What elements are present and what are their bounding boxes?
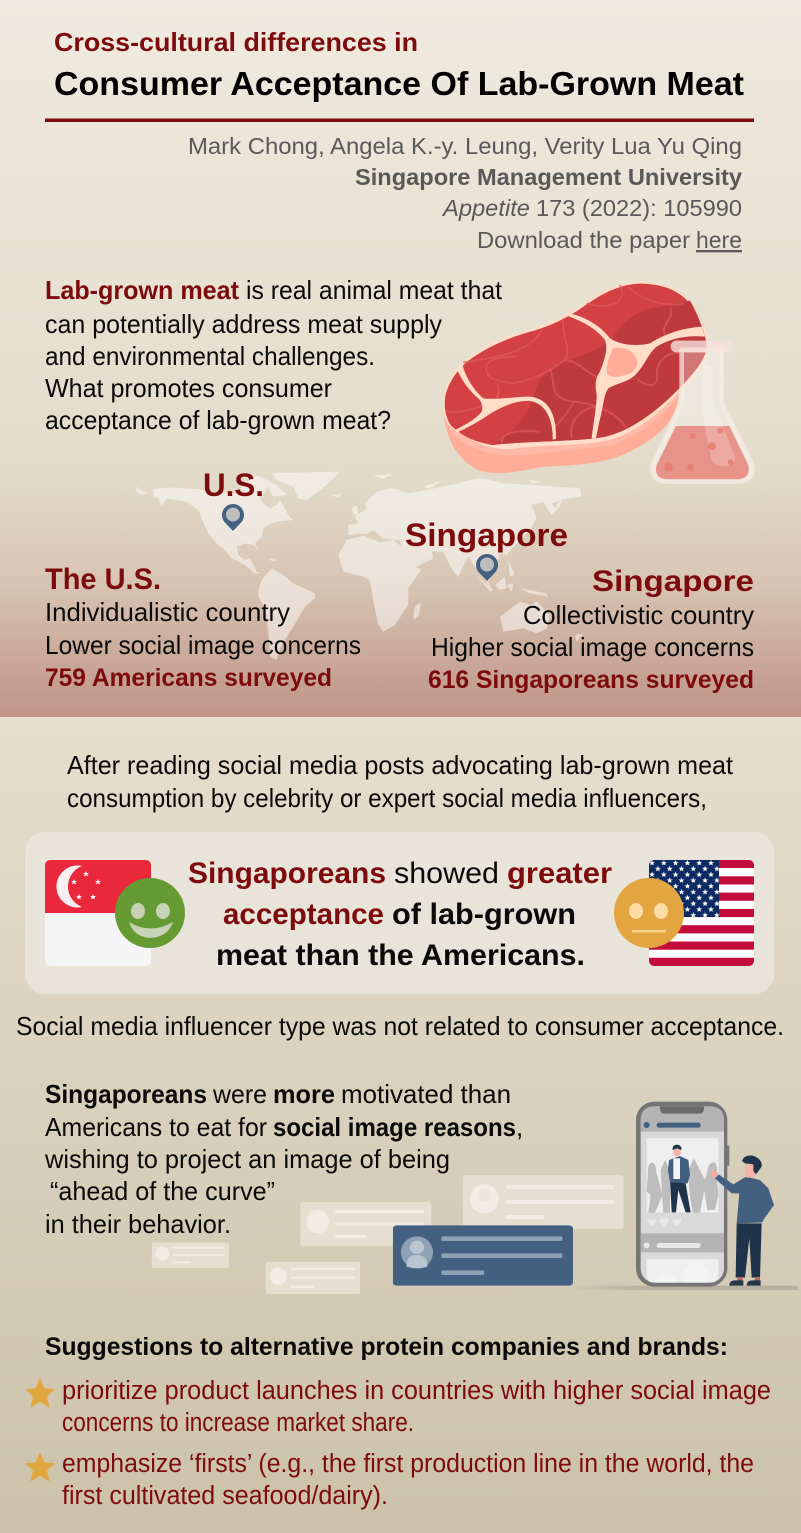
- panel: The U.S.: The U.S.: [45, 563, 161, 596]
- suggestion 2: emphasize ‘firsts’ (e.g., the first production line in the world, the: [62, 1450, 754, 1478]
- world map: [136, 472, 583, 660]
- flag: Singapore: [45, 860, 151, 966]
- social image paragraph: wishing to project an image of being: [44, 1144, 450, 1174]
- finding text: [188, 857, 612, 972]
- suggestion 2: [25, 1450, 754, 1510]
- post card small middle: [266, 1262, 360, 1294]
- social image paragraph: motivated than: [341, 1079, 511, 1109]
- post card large right: [463, 1175, 624, 1229]
- icon: neutral face: [614, 878, 684, 948]
- ground shadow: [565, 1286, 798, 1290]
- intro text: Lab-grown meat: [45, 275, 239, 305]
- social image paragraph: social image reasons: [273, 1112, 516, 1142]
- title rule: [45, 118, 754, 122]
- lead-in text: After reading social media posts advocating lab-grown meat: [67, 750, 734, 780]
- authors and citation: here: [696, 227, 742, 253]
- authors and citation: Appetite: [441, 195, 530, 221]
- post card mid left: [300, 1202, 431, 1246]
- person: [711, 1155, 774, 1286]
- lead-in text: [67, 750, 734, 813]
- social image paragraph: in their behavior.: [45, 1209, 231, 1239]
- flag: United States: [649, 860, 754, 966]
- finding text: meat than the Americans.: [216, 939, 585, 972]
- influencer type note: Social media influencer type was not related to consumer acceptance.: [16, 1011, 784, 1041]
- authors and citation: Mark Chong, Angela K.-y. Leung, Verity Lua Yu Qing: [188, 133, 742, 159]
- panel: The U.S.: 759 Americans surveyed: [45, 664, 332, 692]
- finding text: showed: [394, 857, 499, 890]
- icon: star: [25, 1378, 55, 1408]
- finding text: acceptance: [223, 898, 384, 931]
- panel: Singapore: Higher social image concerns: [431, 632, 754, 662]
- intro text: and environmental challenges.: [45, 341, 375, 371]
- map label: U.S.: U.S.: [203, 467, 264, 503]
- social image paragraph: ,: [516, 1112, 523, 1142]
- illustration: phone and person: [588, 1102, 798, 1290]
- panel: The U.S.: [45, 563, 361, 692]
- authors and citation: Singapore Management University: [355, 164, 742, 190]
- title: kicker: Cross-cultural differences in: [54, 27, 418, 57]
- panel: Singapore: [428, 565, 754, 694]
- intro text: What promotes consumer: [45, 373, 332, 403]
- phone: [636, 1102, 729, 1291]
- suggestion 2: first cultivated seafood/dairy).: [62, 1482, 388, 1510]
- panel: key finding: [25, 832, 774, 994]
- panel: The U.S.: Individualistic country: [45, 597, 290, 627]
- title block: [45, 27, 754, 122]
- illustration: flask: [652, 341, 753, 482]
- panel: The U.S.: Lower social image concerns: [45, 630, 361, 660]
- social image paragraph: more: [273, 1079, 335, 1109]
- icon: star: [25, 1452, 55, 1482]
- intro text: can potentially address meat supply: [45, 309, 442, 339]
- panel: Singapore: 616 Singaporeans surveyed: [428, 666, 754, 694]
- icon: smiling face: [115, 878, 185, 948]
- background: lower section: [0, 717, 801, 1533]
- authors and citation: Download the paper: [477, 227, 690, 253]
- suggestion 1: concerns to increase market share.: [62, 1409, 414, 1437]
- illustration: steak: [443, 282, 710, 473]
- panel: Singapore: Collectivistic country: [523, 600, 754, 630]
- intro text: [45, 275, 503, 435]
- suggestions heading: Suggestions to alternative protein companies and brands:: [45, 1333, 728, 1361]
- title: main heading: Consumer Acceptance Of Lab-Grown Meat: [54, 65, 744, 102]
- suggestion 1: [25, 1377, 771, 1437]
- map pin: Singapore: [476, 554, 498, 581]
- authors and citation: 173 (2022): 105990: [536, 195, 742, 221]
- social image paragraph: “ahead of the curve”: [50, 1176, 275, 1206]
- intro text: is real animal meat that: [246, 275, 503, 305]
- post card small left: [152, 1242, 229, 1268]
- social image paragraph: [44, 1079, 523, 1239]
- illustration: social media posts: [152, 1175, 624, 1294]
- lead-in text: consumption by celebrity or expert social media influencers,: [67, 783, 707, 813]
- finding text: Singaporeans: [188, 857, 386, 890]
- social image paragraph: Americans to eat for: [45, 1112, 267, 1142]
- post card highlighted: [393, 1225, 573, 1286]
- suggestion 1: prioritize product launches in countries with higher social image: [62, 1377, 771, 1405]
- finding text: of lab-grown: [392, 898, 576, 931]
- authors and citation: [188, 133, 742, 253]
- social image paragraph: Singaporeans: [45, 1079, 207, 1109]
- finding text: greater: [507, 857, 612, 890]
- intro text: acceptance of lab-grown meat?: [45, 405, 391, 435]
- background: upper section: [0, 0, 801, 717]
- map label: Singapore: Singapore: [405, 517, 568, 553]
- social image paragraph: were: [212, 1079, 267, 1109]
- panel: Singapore: Singapore: [592, 565, 754, 598]
- map pin: U.S.: [222, 504, 244, 531]
